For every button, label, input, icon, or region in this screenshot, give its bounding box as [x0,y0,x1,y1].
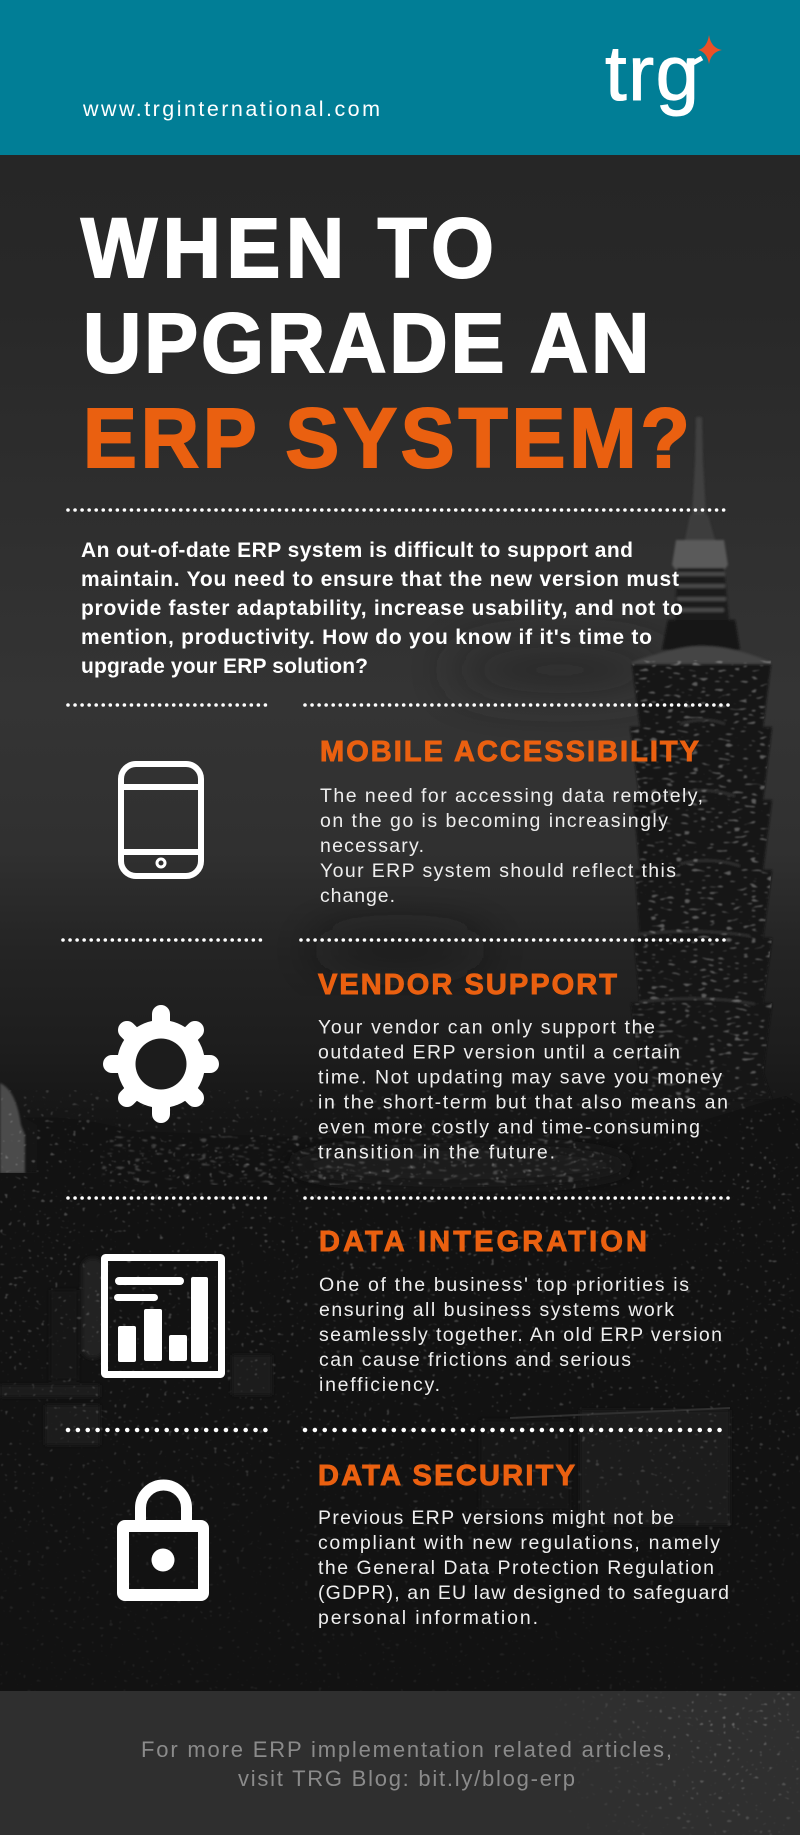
text: mobile accessibility: necessary. [320,835,424,857]
heading: vendor support: VENDOR SUPPORT [318,969,617,1001]
text: mobile accessibility: on the go is becoming increasingly [320,810,668,832]
header band [0,0,800,155]
city skyline [0,1096,800,1691]
intro paragraph: upgrade your ERP solution? [81,655,368,678]
logo: trg with star: trg [605,29,699,117]
text: vendor support: in the short-term but that also means an [318,1092,728,1114]
text: vendor support: Your vendor can only support the [318,1016,655,1038]
text: data integration: inefficiency. [319,1374,440,1396]
text: data security: (GDPR), an EU law designed to safeguard [318,1582,729,1604]
icon: padlock [117,1485,209,1601]
text: data security: Previous ERP versions might not be [318,1507,674,1529]
intro paragraph: maintain. You need to ensure that the new version must [81,568,679,591]
footer text: For more ERP implementation related articles, [141,1737,672,1762]
text: mobile accessibility: The need for accessing data remotely, [320,785,703,807]
text: data security [318,1507,729,1629]
text: data integration [319,1274,722,1396]
panel: mobile accessibility [121,736,703,907]
intro paragraph: mention, productivity. How do you know if it's time to [81,626,652,649]
panel: data integration [104,1226,722,1396]
text: mobile accessibility: Your ERP system should reflect this [320,860,676,882]
tower: Taipei 101 [620,417,780,1100]
text: data integration: seamlessly together. An old ERP version [319,1324,722,1346]
footer band [0,1691,800,1835]
intro paragraph: provide faster adaptability, increase usability, and not to [81,597,683,620]
main title: ERP SYSTEM? [83,392,690,485]
footer text: visit TRG Blog: bit.ly/blog-erp [238,1766,575,1791]
text: data integration: can cause frictions and serious [319,1349,631,1371]
heading: data integration: DATA INTEGRATION [319,1226,647,1258]
text: vendor support [318,1016,728,1164]
panel: vendor support [112,969,728,1164]
icon: tablet [121,764,201,876]
text: data integration: ensuring all business systems work [319,1299,674,1321]
text: data security: the General Data Protection Regulation [318,1557,714,1579]
heading: mobile accessibility: MOBILE ACCESSIBILITY [320,736,699,768]
icon: report chart [104,1258,222,1374]
main title: WHEN TO [81,202,494,295]
left dome building [0,1083,38,1390]
text: mobile accessibility: change. [320,885,395,907]
main title: UPGRADE AN [83,297,649,390]
intro paragraph [81,539,683,678]
text: vendor support: time. Not updating may save you money [318,1066,722,1088]
heading: data security: DATA SECURITY [318,1460,575,1492]
text: vendor support: outdated ERP version until a certain [318,1042,680,1064]
panel: data security [117,1460,729,1629]
main title [81,202,690,485]
text: data security: compliant with new regulations, namely [318,1532,720,1554]
footer text [141,1737,672,1791]
text: data security: personal information. [318,1607,538,1629]
text: data integration: One of the business' top priorities is [319,1274,689,1296]
text: vendor support: transition in the future. [318,1142,555,1164]
text: mobile accessibility [320,785,703,907]
icon: gear [112,1014,210,1114]
intro paragraph: An out-of-date ERP system is difficult to support and [81,539,633,562]
website address: www.trginternational.com [82,97,380,121]
text: vendor support: even more costly and time-consuming [318,1116,700,1138]
